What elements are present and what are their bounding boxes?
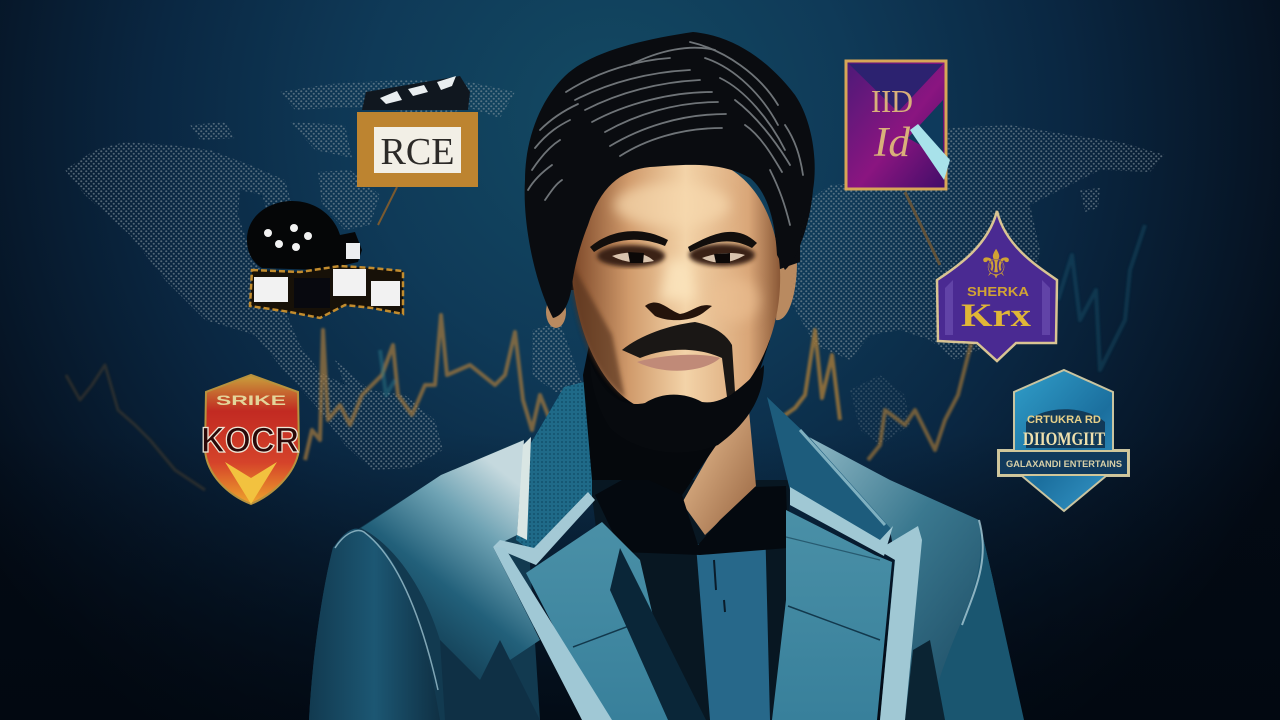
logo: red shield: SRIKE [216,392,286,408]
logo: purple Krx pentagon: Krx [961,298,1032,334]
connector lines [378,187,940,265]
left lapel [493,380,595,565]
hair [525,32,815,318]
neck [682,400,756,535]
left shoulder and sleeve [309,440,540,720]
logo: blue badge: DIIOMGIIT [1023,429,1105,450]
logo: purple Krx pentagon: ⚜ [978,242,1014,288]
nose [645,302,712,320]
stock chart: right [778,225,1145,460]
logo: red shield [201,375,299,504]
logo: purple Krx pentagon [937,211,1057,361]
eye shadows [597,244,755,267]
shirt collar [595,470,788,555]
dotted world map [65,80,1165,470]
moustache [622,322,735,397]
logo: purple monogram: Id [873,120,911,166]
left front panel [493,522,706,720]
goatee and beard [590,360,764,453]
shirt [590,480,790,720]
logo: red shield: KOCR [201,421,299,460]
right lapel [767,397,893,556]
logo: blue badge [998,370,1129,511]
portrait [309,32,1024,720]
eyebrows [590,231,757,252]
forehead and nose highlight [614,183,760,322]
stock chart: left [66,315,550,490]
right front panel [772,510,922,720]
logo: purple Krx pentagon: SHERKA [967,284,1030,299]
face [570,155,780,416]
logo: purple monogram: IID [871,83,913,119]
lips [637,355,720,371]
logo: purple monogram [846,61,950,189]
cheek shadow [571,262,625,398]
hair backing [560,120,800,290]
ears [546,262,797,328]
eyes [612,252,745,263]
logo: blue badge: CRTUKRA RD [1027,414,1101,426]
beard over neck [583,340,770,495]
logo: film reel and strip [247,201,403,318]
right shoulder and sleeve [809,437,1024,720]
logo: blue badge: GALAXANDI ENTERTAINS [1006,459,1122,469]
logo: RCE clapperboard [357,76,478,187]
logo: RCE clapperboard: RCE [380,131,454,173]
